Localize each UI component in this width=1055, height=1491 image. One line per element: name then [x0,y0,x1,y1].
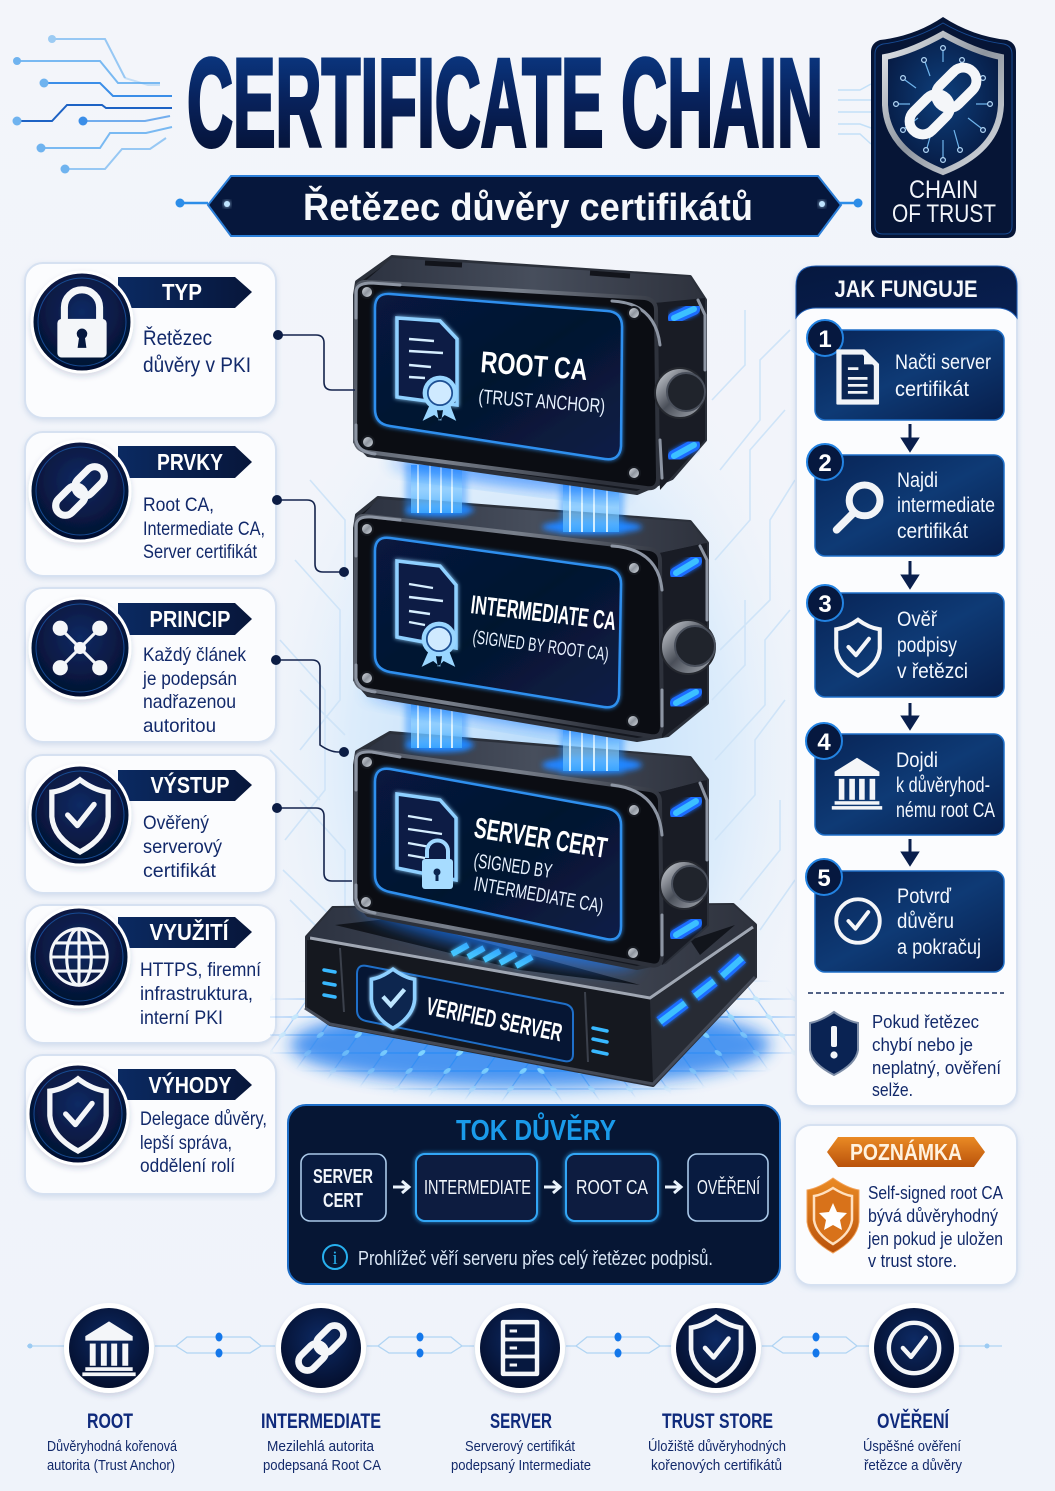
bottom item: trust store [648,1303,786,1474]
beams: root to intermediate [405,462,624,533]
icon: globe [29,907,129,1007]
connector lines from cards to modules [271,330,355,881]
icon: document with rosette [397,561,456,667]
bottom item: trust store: Úložiště důvěryhodných [648,1438,786,1455]
panel: poznámka: Self-signed root CA [868,1182,1004,1203]
panel: využití: HTTPS, firemní [140,959,262,981]
panel: výstup: certifikát [143,860,217,882]
step 4 [806,723,1004,835]
panel: poznámka: jen pokud je uložen [867,1228,1003,1249]
decorative circuit lines left of title [12,35,172,174]
panel: výstup: Ověřený [143,812,209,834]
bottom item: server [451,1303,591,1474]
bottom item: server: Serverový certifikát [465,1438,576,1455]
panel: princip: autoritou [143,715,216,737]
step 2: 2 [818,450,832,477]
module: server cert [355,733,708,982]
panel: výhody: VÝHODY [148,1071,232,1098]
bottom item: ověření: OVĚŘENÍ [877,1409,950,1433]
bottom item: ověření: řetězce a důvěry [864,1457,962,1474]
beams: intermediate to server [405,700,624,774]
icon: shield check [28,1064,128,1164]
flow box: intermediate [416,1154,537,1221]
module: root ca [355,257,705,499]
badge: chain of trust: OF TRUST [892,200,996,228]
arrow [903,703,917,728]
bottom item: intermediate [261,1303,381,1474]
arrow [903,561,917,587]
bottom item: ověření: Úspěšné ověření [863,1438,962,1455]
step 3: Ověř [897,608,938,631]
icon: server rack [475,1303,565,1393]
screen [375,538,621,707]
step 4: 4 [817,729,831,756]
icon: bank [64,1303,154,1393]
module: server cert: INTERMEDIATE CA) [472,873,605,918]
subtitle banner [176,176,862,236]
warning note: neplatný, ověření [872,1057,1002,1078]
panel: poznámka: v trust store. [868,1250,957,1271]
step 5: Potvrď [897,885,952,908]
flow box: server cert: CERT [323,1190,363,1212]
panel: výhody: Delegace důvěry, [140,1108,267,1130]
bottom item: root: ROOT [87,1410,133,1433]
panel: typ: důvěry v PKI [143,354,251,377]
panel: poznámka: bývá důvěryhodný [868,1205,999,1226]
module: intermediate ca: (SIGNED BY ROOT CA) [471,627,610,666]
panel: poznámka [795,1125,1017,1285]
flow box: root ca [566,1154,658,1221]
icon: orange shield [807,1178,859,1253]
step 5: a pokračuj [897,936,981,959]
module: server cert: SERVER CERT [472,812,609,865]
panel: prvky: Server certifikát [143,541,257,563]
icon: info [323,1245,347,1269]
panel: výhody: lepší správa, [140,1132,232,1154]
warning note: chybí nebo je [872,1034,973,1055]
step 1: certifikát [895,378,969,401]
panel: princip: PRINCIP [150,606,230,632]
panel: využití [25,905,276,1043]
panel: tok důvěry: Prohlížeč věří serveru přes celý řetězec podpisů. [358,1248,713,1270]
bottom item: intermediate: Mezilehlá autorita [267,1438,375,1455]
background circuit pattern [270,310,795,950]
panel: výhody [25,1055,276,1194]
icon: shield [30,765,130,865]
floor glow grid under base [270,980,795,1102]
step 1 [807,320,1004,420]
knob [660,861,708,909]
step 3 [807,585,1004,697]
icon: network nodes [30,598,130,698]
panel: tok důvěry: TOK DŮVĚRY [456,1111,616,1147]
panel: využití: infrastruktura, [140,983,253,1005]
bottom item: root: autorita (Trust Anchor) [47,1457,175,1474]
bottom item: root: Důvěryhodná kořenová [47,1438,178,1455]
header: jak funguje [796,266,1017,318]
flow box: root ca: ROOT CA [576,1177,649,1199]
step 3: v řetězci [897,660,968,683]
arrow [544,1181,560,1193]
panel: princip [25,588,276,742]
bottom item: root [47,1303,178,1474]
panel: typ: Řetězec [143,327,212,350]
header: jak funguje: JAK FUNGUJE [834,276,978,303]
panel: výstup [25,755,276,893]
base label plate: VERIFIED SERVER [424,992,565,1047]
icon: shield check [671,1303,761,1393]
bottom item: server: SERVER [490,1410,552,1433]
module: root ca: ROOT CA [479,346,589,387]
step 2 [807,444,1004,556]
panel: prvky: Intermediate CA, [143,518,265,540]
step 1: 1 [818,326,832,353]
icon: document with rosette [397,318,457,421]
arrow [665,1181,681,1193]
icon: silver shield with chain [885,34,1001,172]
step 4: k důvěryhod- [896,774,990,797]
arrow [903,839,917,864]
status lights left [324,970,335,997]
icon: lock [32,272,132,372]
flow box: intermediate: INTERMEDIATE [424,1177,531,1199]
arrow [903,424,917,450]
panel: prvky [25,432,276,576]
warning note: selže. [872,1079,913,1100]
bottom item: intermediate: podepsaná Root CA [263,1457,381,1474]
knob [661,620,715,674]
step 2: intermediate [897,494,995,517]
bottom item: trust store: kořenových certifikátů [651,1457,782,1474]
step 5: 5 [817,865,831,892]
screen [375,294,622,459]
base: verified server [305,905,755,1085]
panel: prvky: Root CA, [143,494,214,516]
step 2: Najdi [897,469,938,492]
status lights right [593,1028,607,1054]
panel: princip: nadřazenou [143,691,236,713]
icon: info: i [332,1248,338,1269]
warning note [810,1011,1002,1100]
step 5 [806,859,1004,972]
module: root ca: (TRUST ANCHOR) [478,386,606,418]
step 1: Načti server [895,351,991,374]
panel: prvky: PRVKY [157,449,223,475]
flow box: ověření: OVĚŘENÍ [697,1176,760,1199]
arrow [393,1181,409,1193]
panel: využití: interní PKI [140,1007,223,1029]
side lights [660,958,742,1022]
icon: chain link [276,1303,366,1393]
step 4: nému root CA [896,799,995,822]
icon: document with lock [397,794,456,889]
step 5: důvěru [897,910,954,933]
base label plate [357,966,573,1061]
orange heading: POZNÁMKA [850,1138,962,1165]
knob [655,368,705,418]
bottom item: server: podepsaný Intermediate [451,1457,591,1474]
module: server cert: (SIGNED BY [472,850,554,883]
panel: typ: TYP [162,279,202,305]
panel: jak funguje [796,266,1017,1106]
step 3: 3 [818,591,832,618]
panel: tok důvěry [288,1105,780,1284]
bottom item: ověření [863,1303,962,1474]
decorative circuit lines right of title [838,84,871,144]
screen [375,769,621,939]
icon: chain link [30,441,130,541]
panel: výstup: VÝSTUP [150,771,230,798]
panel: princip: je podepsán [142,668,237,690]
panel: výstup: serverový [143,836,222,858]
bottom item: trust store: TRUST STORE [662,1410,773,1433]
icon: check circle [869,1303,959,1393]
step 3: podpisy [897,634,957,657]
flow box: ověření [688,1154,768,1221]
subtitle banner: Řetězec důvěry certifikátů [303,185,753,229]
panel: typ [25,263,276,418]
background glow behind tower [250,320,830,1200]
flow box: server cert [301,1154,386,1221]
warning note: Pokud řetězec [872,1011,979,1032]
icon: glowing shield [371,969,415,1028]
badge: chain of trust: CHAIN [909,176,978,204]
step 4: Dojdi [896,749,938,772]
flow box: server cert: SERVER [313,1166,373,1188]
module: intermediate ca [355,498,715,742]
panel: princip: Každý článek [143,644,246,666]
step 2: certifikát [897,520,968,543]
panel: výhody: oddělení rolí [140,1155,236,1177]
panel: využití: VYUŽITÍ [150,918,229,945]
badge: chain of trust [871,17,1016,238]
module: intermediate ca: INTERMEDIATE CA [469,589,618,636]
bottom item: intermediate: INTERMEDIATE [261,1410,381,1433]
bottom row connectors [27,1332,1002,1358]
